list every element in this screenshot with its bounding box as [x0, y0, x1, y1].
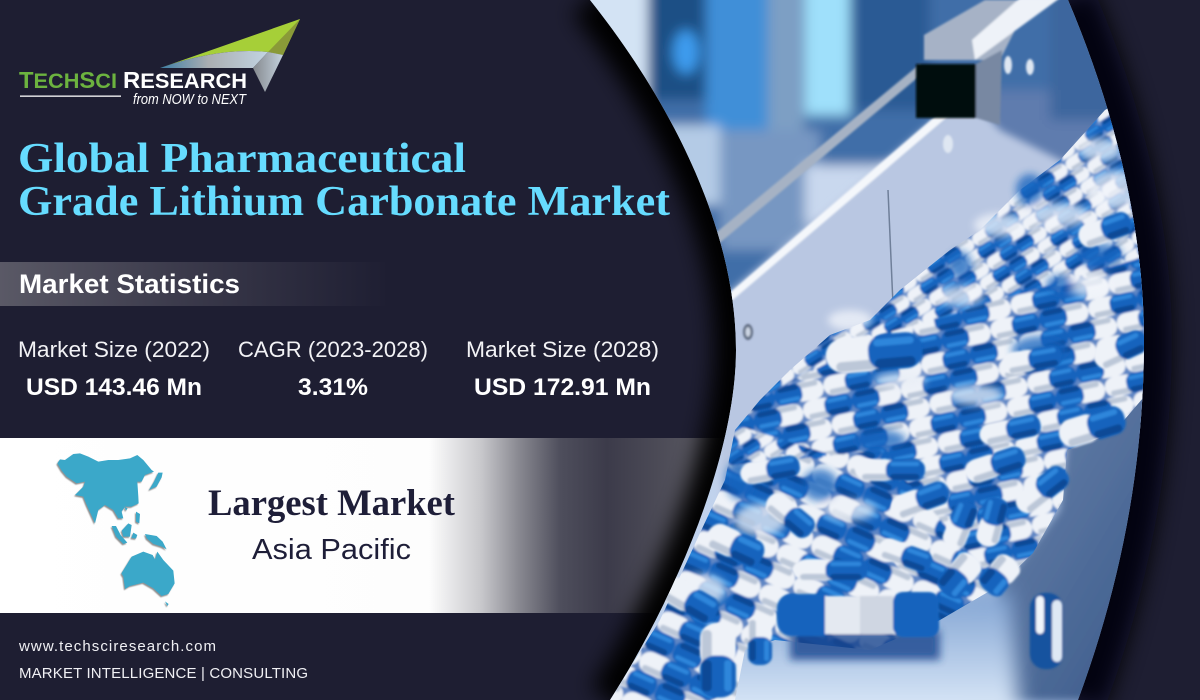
- title: Grade Lithium Carbonate Market: [18, 179, 670, 225]
- photo: steel table: [996, 386, 1143, 700]
- big horizontal capsule: [777, 592, 939, 637]
- text: Asia Pacific: Asia Pacific: [252, 534, 411, 566]
- logo mark: paper plane: [160, 19, 300, 92]
- stat: market size 2028: [466, 337, 659, 401]
- logo wordmark: TECHSCI: [19, 67, 117, 93]
- shadow along the photo's left edge: [590, 0, 736, 700]
- heading: market statistics: Market Statistics: [19, 269, 240, 299]
- photo: pharmaceutical capsules on a production line: [570, 0, 1170, 700]
- heading: largest market: Largest Market: [208, 483, 456, 524]
- band: largest market background: [0, 438, 740, 613]
- stat: CAGR: 3.31%: [298, 374, 368, 401]
- photo: bolts: [743, 56, 1034, 340]
- footer: tagline: MARKET INTELLIGENCE | CONSULTING: [19, 665, 308, 682]
- photo: lower white rail: [731, 116, 948, 302]
- logo: TechSci Research from NOW to NEXT: [19, 19, 300, 108]
- stat: market size 2022: [18, 337, 210, 401]
- photo: individual foreground capsules: [657, 209, 1150, 698]
- logo rule: [20, 96, 121, 97]
- photo: soft capsule blobs breaking up the pile: [674, 138, 1143, 606]
- shadow along the photo's right edge: [1068, 0, 1144, 700]
- logo tagline: from NOW to NEXT: [133, 91, 248, 108]
- photo: capsule pile texture: [600, 80, 1160, 700]
- icon: Asia Pacific map: [57, 453, 175, 606]
- photo background: blurred blue machinery columns: [570, 0, 1170, 300]
- stat: CAGR: [238, 337, 428, 401]
- capsule reflections: [790, 630, 940, 660]
- title: [18, 136, 670, 225]
- stat: market size 2028: USD 172.91 Mn: [474, 374, 651, 401]
- photo: guide wire: [888, 190, 893, 305]
- photo: upper gray rail: [712, 64, 922, 246]
- photo: filling machine head: [916, 0, 1060, 125]
- band: market statistics heading background: [0, 262, 390, 306]
- stat: market size 2022: USD 143.46 Mn: [26, 374, 202, 401]
- stat: market size 2022: Market Size (2022): [18, 337, 210, 362]
- footer: website: www.techsciresearch.com: [18, 638, 216, 655]
- logo wordmark second word: RESEARCH: [123, 67, 247, 93]
- lone capsule: [1030, 593, 1063, 669]
- photo: conveyor panel below rail: [716, 116, 1144, 480]
- stat: market size 2028: Market Size (2028): [466, 337, 659, 362]
- photo: bright table surface: [700, 590, 1020, 700]
- title: Global Pharmaceutical: [18, 136, 466, 182]
- stat: CAGR: CAGR (2023-2028): [238, 337, 428, 362]
